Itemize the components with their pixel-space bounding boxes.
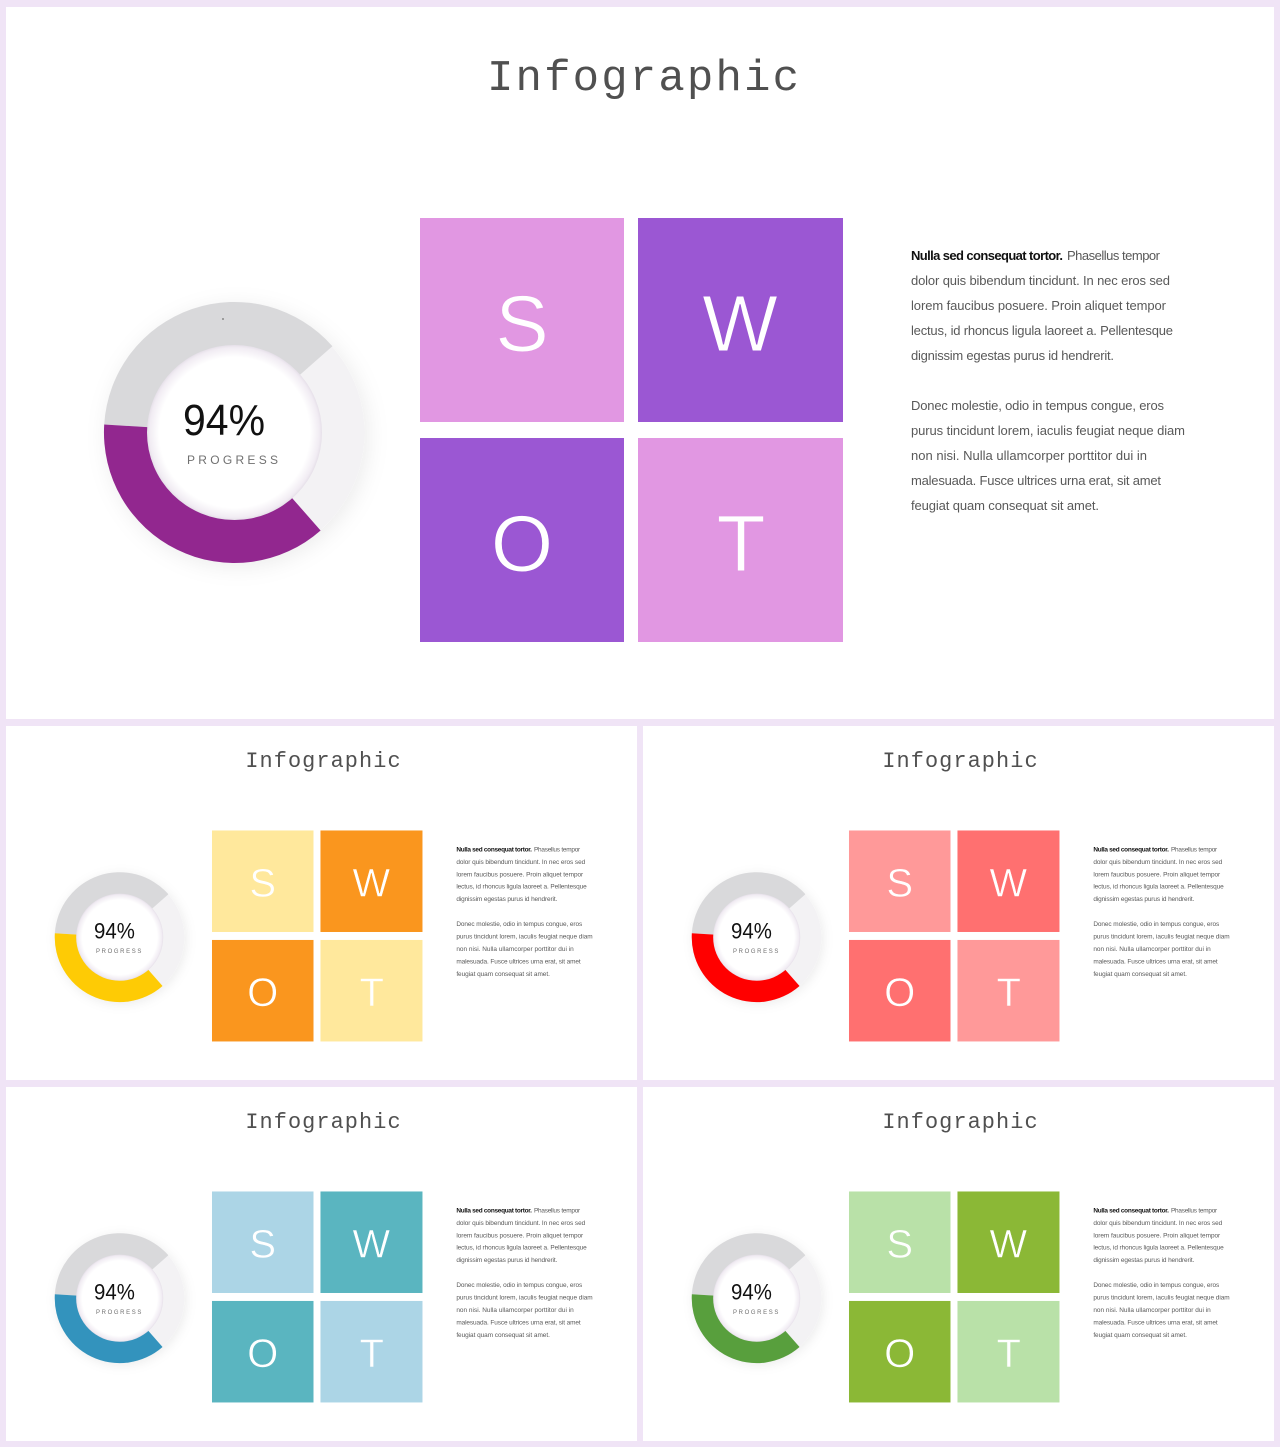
SWOT grid: W xyxy=(352,862,390,906)
body text: malesuada. Fusce ultrices urna erat, sit amet xyxy=(456,1319,581,1326)
body text: Nulla sed consequat tortor. xyxy=(456,1207,532,1214)
body text: Donec molestie, odio in tempus congue, eros xyxy=(1093,1282,1219,1289)
body text: feugiat quam consequat sit amet. xyxy=(456,1332,550,1339)
body text: dignissim egestas purus id hendrerit. xyxy=(1093,1257,1195,1264)
body text: Phasellus tempor xyxy=(534,846,581,853)
SWOT grid: O xyxy=(884,1332,915,1376)
SWOT grid: W xyxy=(702,279,778,368)
SWOT grid: S xyxy=(249,1223,276,1267)
body text: Donec molestie, odio in tempus congue, eros xyxy=(456,1282,582,1289)
SWOT grid: S xyxy=(249,862,276,906)
title: Infographic xyxy=(245,749,401,774)
body text: non nisi. Nulla ullamcorper porttitor dui in xyxy=(456,946,574,953)
donut chart: red progress: PROGRESS xyxy=(733,949,778,955)
body text: Phasellus tempor xyxy=(534,1207,581,1214)
SWOT grid: O xyxy=(247,971,278,1015)
body text: Donec molestie, odio in tempus congue, eros xyxy=(456,921,582,928)
body text: Donec molestie, odio in tempus congue, eros xyxy=(1093,921,1219,928)
donut chart: yellow progress xyxy=(55,872,184,1002)
SWOT grid: T xyxy=(717,499,765,588)
body text: dolor quis bibendum tincidunt. In nec eros sed xyxy=(1093,1220,1223,1227)
body text: non nisi. Nulla ullamcorper porttitor dui in xyxy=(1093,946,1211,953)
donut chart: blue progress: PROGRESS xyxy=(96,1310,141,1316)
body text: Phasellus tempor xyxy=(1067,248,1161,263)
donut chart: purple progress xyxy=(104,302,364,563)
donut chart: yellow progress: 94% xyxy=(94,918,135,943)
body text: Nulla sed consequat tortor. xyxy=(1093,1207,1169,1214)
donut chart: green progress: PROGRESS xyxy=(733,1310,778,1316)
body text: non nisi. Nulla ullamcorper porttitor dui in xyxy=(456,1307,574,1314)
body text: dignissim egestas purus id hendrerit. xyxy=(456,896,558,903)
body text: lectus, id rhoncus ligula laoreet a. Pellentesque xyxy=(911,323,1173,338)
panel: yellow SWOT slide xyxy=(6,726,637,1080)
body text: lorem faucibus posuere. Proin aliquet tempor xyxy=(456,871,584,878)
body text: lectus, id rhoncus ligula laoreet a. Pellentesque xyxy=(1093,1245,1224,1252)
title: Infographic xyxy=(245,1110,401,1135)
SWOT grid: T xyxy=(997,971,1021,1015)
body text xyxy=(911,248,1185,513)
SWOT grid: O xyxy=(491,499,553,588)
body text: purus tincidunt lorem, iaculis feugiat neque diam xyxy=(911,423,1185,438)
body text: non nisi. Nulla ullamcorper porttitor dui in xyxy=(1093,1307,1211,1314)
donut chart: blue progress xyxy=(55,1233,184,1363)
donut chart: red progress xyxy=(692,872,821,1002)
body text xyxy=(1093,846,1230,978)
body text: Nulla sed consequat tortor. xyxy=(911,248,1063,263)
SWOT grid: T xyxy=(997,1332,1021,1376)
body text: purus tincidunt lorem, iaculis feugiat neque diam xyxy=(456,1294,593,1301)
title: Infographic xyxy=(882,749,1038,774)
panel: red SWOT slide xyxy=(643,726,1274,1080)
body text: dignissim egestas purus id hendrerit. xyxy=(456,1257,558,1264)
panel: green SWOT slide xyxy=(643,1087,1274,1441)
body text: purus tincidunt lorem, iaculis feugiat neque diam xyxy=(456,933,593,940)
body text: Donec molestie, odio in tempus congue, eros xyxy=(911,398,1164,413)
body text: dolor quis bibendum tincidunt. In nec eros sed xyxy=(1093,859,1223,866)
SWOT grid xyxy=(212,1191,422,1402)
body text: lectus, id rhoncus ligula laoreet a. Pellentesque xyxy=(456,884,587,891)
body text: Nulla sed consequat tortor. xyxy=(456,846,532,853)
SWOT grid: W xyxy=(989,862,1027,906)
body text: dignissim egestas purus id hendrerit. xyxy=(1093,896,1195,903)
SWOT grid: S xyxy=(886,862,913,906)
SWOT grid: W xyxy=(352,1223,390,1267)
body text: Nulla sed consequat tortor. xyxy=(1093,846,1169,853)
body text: non nisi. Nulla ullamcorper porttitor dui in xyxy=(911,448,1147,463)
body text: Phasellus tempor xyxy=(1171,846,1218,853)
title: Infographic xyxy=(487,54,799,104)
donut chart: red progress: 94% xyxy=(731,918,772,943)
body text: malesuada. Fusce ultrices urna erat, sit amet xyxy=(1093,958,1218,965)
body text: lectus, id rhoncus ligula laoreet a. Pellentesque xyxy=(456,1245,587,1252)
donut chart: purple progress: 94% xyxy=(183,396,265,445)
body text: Phasellus tempor xyxy=(1171,1207,1218,1214)
body text: dignissim egestas purus id hendrerit. xyxy=(911,348,1114,363)
donut chart: blue progress: 94% xyxy=(94,1279,135,1304)
body text: feugiat quam consequat sit amet. xyxy=(1093,971,1187,978)
body text: purus tincidunt lorem, iaculis feugiat neque diam xyxy=(1093,1294,1230,1301)
body text: lorem faucibus posuere. Proin aliquet tempor xyxy=(911,298,1167,313)
body text: purus tincidunt lorem, iaculis feugiat neque diam xyxy=(1093,933,1230,940)
body text: lorem faucibus posuere. Proin aliquet tempor xyxy=(1093,871,1221,878)
SWOT grid xyxy=(212,830,422,1041)
body text: feugiat quam consequat sit amet. xyxy=(911,498,1099,513)
donut chart: green progress xyxy=(692,1233,821,1363)
SWOT grid: T xyxy=(360,971,384,1015)
donut chart: green progress: 94% xyxy=(731,1279,772,1304)
body text: lectus, id rhoncus ligula laoreet a. Pellentesque xyxy=(1093,884,1224,891)
body text: dolor quis bibendum tincidunt. In nec eros sed xyxy=(456,1220,586,1227)
SWOT grid xyxy=(849,1191,1059,1402)
body text xyxy=(456,1207,593,1339)
SWOT grid: O xyxy=(884,971,915,1015)
title: Infographic xyxy=(882,1110,1038,1135)
body text: feugiat quam consequat sit amet. xyxy=(456,971,550,978)
SWOT grid: T xyxy=(360,1332,384,1376)
body text: dolor quis bibendum tincidunt. In nec eros sed xyxy=(456,859,586,866)
body text: malesuada. Fusce ultrices urna erat, sit amet xyxy=(1093,1319,1218,1326)
body text: dolor quis bibendum tincidunt. In nec eros sed xyxy=(911,273,1170,288)
body text: malesuada. Fusce ultrices urna erat, sit amet xyxy=(911,473,1161,488)
body text: lorem faucibus posuere. Proin aliquet tempor xyxy=(1093,1232,1221,1239)
body text: malesuada. Fusce ultrices urna erat, sit amet xyxy=(456,958,581,965)
SWOT grid: S xyxy=(886,1223,913,1267)
donut chart: purple progress: PROGRESS xyxy=(187,453,278,467)
body text: feugiat quam consequat sit amet. xyxy=(1093,1332,1187,1339)
SWOT grid xyxy=(849,830,1059,1041)
SWOT grid xyxy=(420,218,843,642)
body text xyxy=(456,846,593,978)
panel: blue SWOT slide xyxy=(6,1087,637,1441)
donut chart: yellow progress: PROGRESS xyxy=(96,949,141,955)
body text xyxy=(1093,1207,1230,1339)
SWOT grid: O xyxy=(247,1332,278,1376)
SWOT grid: W xyxy=(989,1223,1027,1267)
SWOT grid: S xyxy=(495,279,549,368)
body text: lorem faucibus posuere. Proin aliquet tempor xyxy=(456,1232,584,1239)
panel: purple SWOT slide xyxy=(6,7,1274,719)
